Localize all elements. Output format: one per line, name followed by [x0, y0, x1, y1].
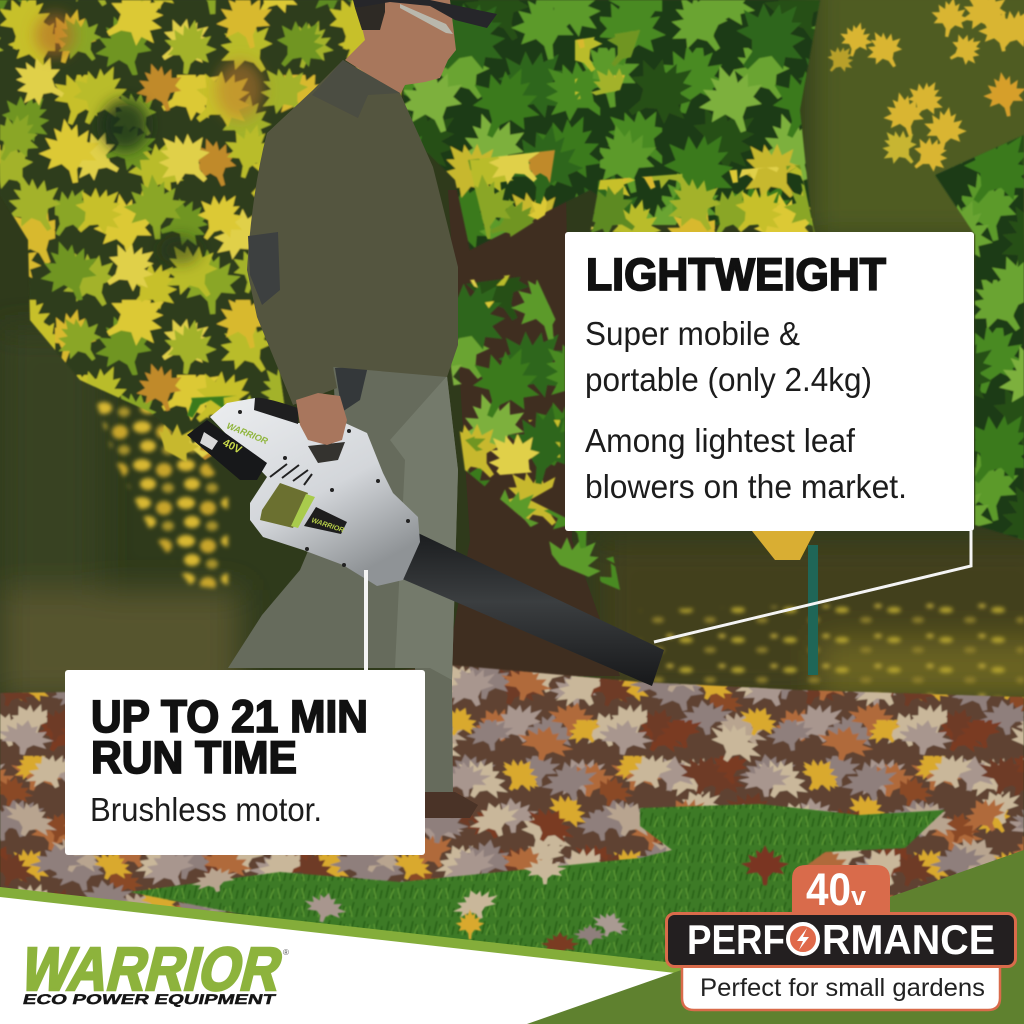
badge: 40v tab	[792, 864, 890, 916]
footer: bright green band	[0, 887, 720, 1024]
upper-centre foliage	[400, 0, 820, 250]
shadow gaps in upper-left foliage	[35, 13, 264, 264]
text: portable: portable (only 2.4kg)	[585, 361, 872, 398]
leaf-covered ground	[0, 665, 1024, 920]
blower: nozzle	[399, 533, 664, 686]
upper-right yellow sprigs	[820, 0, 1024, 182]
man: glasses	[400, 4, 453, 34]
callout line: lightweight	[654, 531, 971, 642]
grass	[130, 804, 945, 980]
man: neck and face	[345, 0, 456, 95]
blower: battery	[187, 420, 267, 480]
blower: screws	[238, 410, 410, 567]
logo: tagline: ECO POWER EQUIPMENT	[21, 992, 277, 1008]
blower: side badge	[304, 507, 347, 534]
man: legs	[228, 364, 458, 795]
text: brushless motor: Brushless motor.	[90, 791, 322, 828]
man: elbow patch	[248, 232, 280, 305]
man with leaf blower: 40V	[221, 437, 244, 457]
man: pocket shadow	[335, 366, 368, 412]
text: among lightest: Among lightest leaf	[585, 422, 856, 459]
badge: 40v tab: 40	[806, 864, 851, 915]
blower: air intake window	[260, 483, 308, 528]
badge: 40v performance	[666, 864, 1016, 1010]
text: super mobile: Super mobile &	[585, 315, 800, 352]
foliage right of man	[450, 275, 620, 590]
footer: white area	[0, 897, 720, 1024]
scattered leaves on grass	[188, 845, 789, 957]
yellow foliage below canopy	[468, 30, 815, 250]
blower: side badge: WARRIOR	[310, 517, 345, 534]
text: blowers on the market: blowers on the market.	[585, 468, 907, 505]
icon: lightning bolt	[788, 924, 818, 954]
man: hair	[355, 0, 385, 30]
blower: housing	[210, 398, 420, 586]
blower: brand mark: WARRIOR	[225, 421, 270, 446]
man: cap	[353, 0, 497, 28]
badge: performance bar: RMANCE	[822, 916, 995, 963]
yellow shrub	[95, 398, 228, 590]
panel: lightweight	[565, 232, 974, 531]
man with leaf blower	[187, 0, 664, 818]
blower: handle	[254, 398, 298, 424]
badge: performance bar: O	[786, 916, 821, 963]
logo: warrior: WARRIOR	[15, 936, 290, 1004]
badge: subtitle box: Perfect for small gardens	[700, 974, 985, 1002]
man: shoulder yoke	[312, 60, 400, 118]
badge: 40v tab: v	[851, 881, 866, 911]
callout line: run time	[364, 570, 368, 670]
badge: performance bar: PERF	[687, 916, 785, 963]
upper-left foliage	[0, 0, 420, 460]
footer: dark green wedge	[527, 850, 1024, 1024]
man: sweater	[247, 60, 458, 405]
blower: vents	[270, 464, 312, 485]
badge: performance bar	[666, 914, 1016, 966]
post	[808, 545, 818, 675]
badge: subtitle box	[682, 960, 1000, 1010]
man: hand	[296, 393, 347, 445]
yellow leaf below panel	[752, 531, 815, 560]
heading: lightweight: LIGHTWEIGHT	[586, 249, 886, 300]
heading: run time: RUN TIME	[91, 732, 297, 783]
logo: registered mark: ®	[283, 948, 289, 957]
foliage above blower	[150, 395, 250, 470]
heading: up to 21 min: UP TO 21 MIN	[91, 691, 368, 742]
panel: run time	[65, 670, 425, 855]
man: boot	[425, 792, 478, 818]
distant yellow leaves right	[640, 600, 1024, 700]
right-side foliage	[935, 135, 1024, 540]
tree trunk	[445, 190, 620, 676]
